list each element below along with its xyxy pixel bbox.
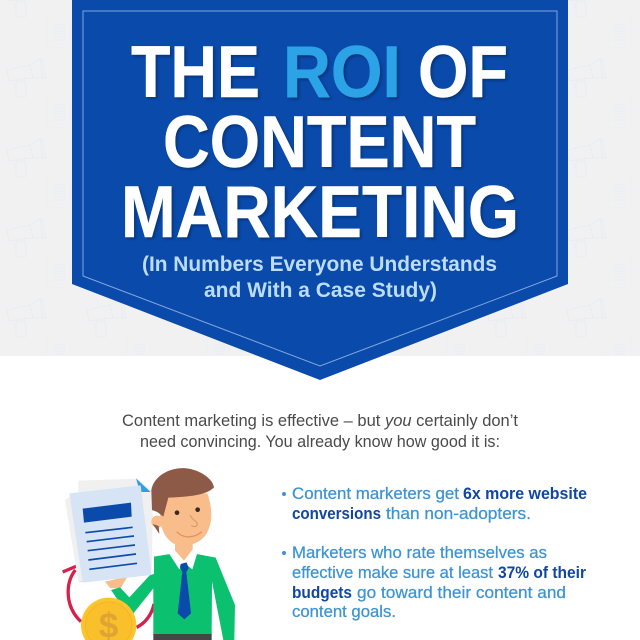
icon: document: [69, 485, 152, 583]
intro text: Content marketing is effective – but you certainly don’t: [122, 411, 518, 430]
bullet 1: 6x more website: [463, 485, 587, 503]
subtitle: (In Numbers Everyone Understands: [142, 253, 497, 276]
bullet 1: conversions: [292, 505, 381, 523]
title: [121, 32, 519, 253]
banner: [72, 0, 568, 380]
bullet 2: effective make sure at least: [292, 564, 493, 582]
header background with icon pattern: [0, 0, 640, 368]
bullet 1: [282, 485, 587, 523]
title: OF: [418, 32, 508, 113]
bullet 2: budgets: [292, 584, 352, 602]
bullet 1: than non-adopters.: [386, 505, 531, 523]
bullet 2: Marketers who rate themselves as: [292, 544, 547, 562]
illustration: man holding document with coin cycle: [63, 468, 235, 640]
bullet 2: [282, 544, 587, 621]
icon: dollar coin: [81, 598, 136, 640]
bullet list: [282, 485, 587, 621]
icon: cycle arrow: [63, 565, 154, 627]
man: [105, 468, 235, 640]
bullet 2: go toward their content and: [357, 584, 566, 602]
title: ROI: [283, 32, 401, 113]
bullet 2: 37% of their: [498, 564, 587, 582]
title: MARKETING: [121, 172, 519, 253]
bullet 2: content goals.: [292, 603, 396, 621]
subtitle: [142, 253, 497, 302]
bullet 1: Content marketers get: [292, 485, 459, 503]
title: THE: [131, 32, 260, 113]
subtitle: and With a Case Study): [204, 279, 437, 302]
intro text: need convincing. You already know how good it is:: [140, 432, 500, 451]
intro text: [122, 411, 518, 451]
icon: back papers: [65, 478, 153, 582]
title: CONTENT: [163, 102, 476, 183]
